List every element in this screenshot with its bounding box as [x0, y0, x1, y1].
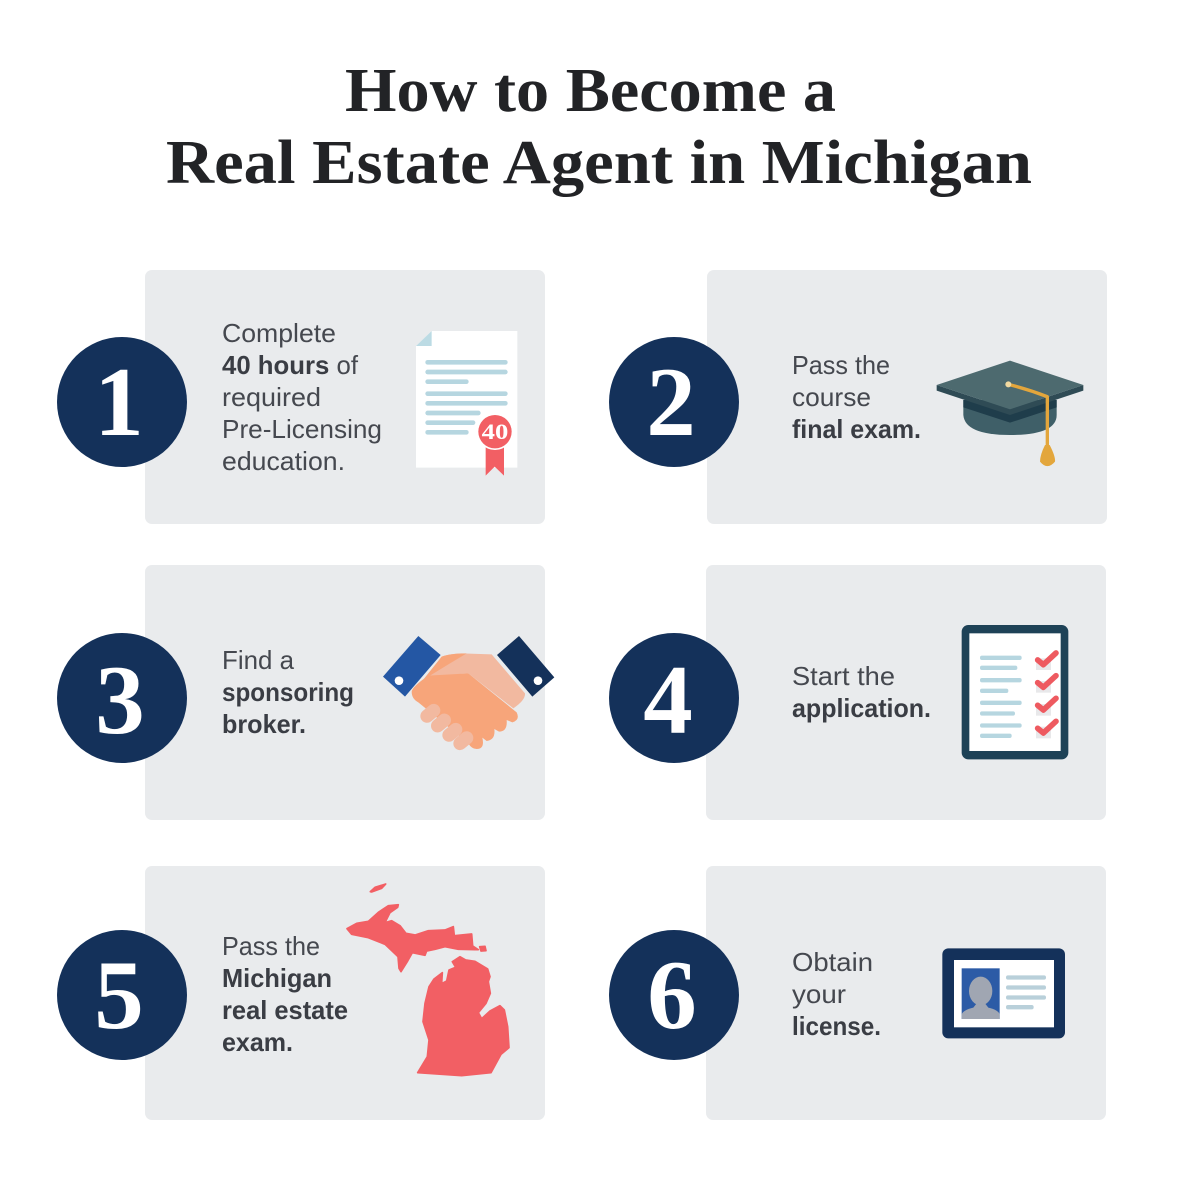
step 5 text [222, 931, 348, 1057]
panel: step 2 [609, 270, 1107, 524]
panel: step 1 [57, 270, 545, 524]
step 1 text: Pre-Licensing [222, 414, 382, 444]
panel: step 5 [57, 866, 545, 1120]
panel: step 6 [609, 866, 1106, 1120]
step 6 text [792, 947, 881, 1041]
card 6 background [706, 866, 1106, 1120]
step 1 text: required [222, 382, 321, 412]
number badge 1 [57, 337, 187, 467]
step 1 text: Complete [222, 318, 336, 348]
step 1 text: 40 hours of [222, 350, 359, 380]
number badge 3: 3 [95, 646, 145, 755]
step 2 text [792, 350, 921, 444]
icon: certificate document: 40 [482, 419, 508, 444]
number badge 6 [609, 930, 739, 1060]
step 2 text: course [792, 382, 871, 412]
panel: step 4 [609, 565, 1106, 820]
card 1 background [145, 270, 545, 524]
number badge 2 [609, 337, 739, 467]
step 4 text: Start the [792, 661, 895, 691]
title: Real Estate Agent in Michigan [166, 129, 1032, 197]
card 5 background [145, 866, 545, 1120]
title [166, 57, 1032, 197]
number badge 3 [57, 633, 187, 763]
step 3 text: sponsoring [222, 677, 354, 707]
icon: graduation cap [937, 361, 1083, 466]
step 6 text: your [792, 979, 846, 1009]
card 4 background [706, 565, 1106, 820]
icon: checklist [962, 625, 1068, 759]
number badge 5: 5 [94, 941, 144, 1050]
step 5 text: real estate [222, 995, 348, 1025]
step 6 text: Obtain [792, 947, 873, 977]
step 4 text [792, 661, 931, 723]
step 3 text [222, 645, 354, 739]
step 2 text: final exam. [792, 414, 921, 444]
number badge 4: 4 [643, 646, 693, 755]
card 2 background [707, 270, 1107, 524]
step 6 text: license. [792, 1011, 881, 1041]
step 3 text: Find a [222, 645, 295, 675]
card 3 background [145, 565, 545, 820]
step 3 text: broker. [222, 709, 306, 739]
title: How to Become a [345, 57, 836, 125]
step 1 text [222, 318, 382, 476]
icon: license card [942, 948, 1065, 1038]
step 5 text: Pass the [222, 931, 320, 961]
step 1 text: education. [222, 446, 345, 476]
number badge 5 [57, 930, 187, 1060]
number badge 4 [609, 633, 739, 763]
panel: step 3 [57, 565, 554, 820]
step 5 text: Michigan [222, 963, 332, 993]
step 4 text: application. [792, 693, 931, 723]
number badge 1: 1 [94, 348, 144, 457]
icon: certificate document [416, 331, 517, 476]
step 2 text: Pass the [792, 350, 890, 380]
icon: Michigan map [347, 884, 509, 1076]
number badge 2: 2 [646, 348, 696, 457]
number badge 6: 6 [647, 941, 697, 1050]
step 5 text: exam. [222, 1027, 293, 1057]
icon: handshake [383, 636, 554, 753]
